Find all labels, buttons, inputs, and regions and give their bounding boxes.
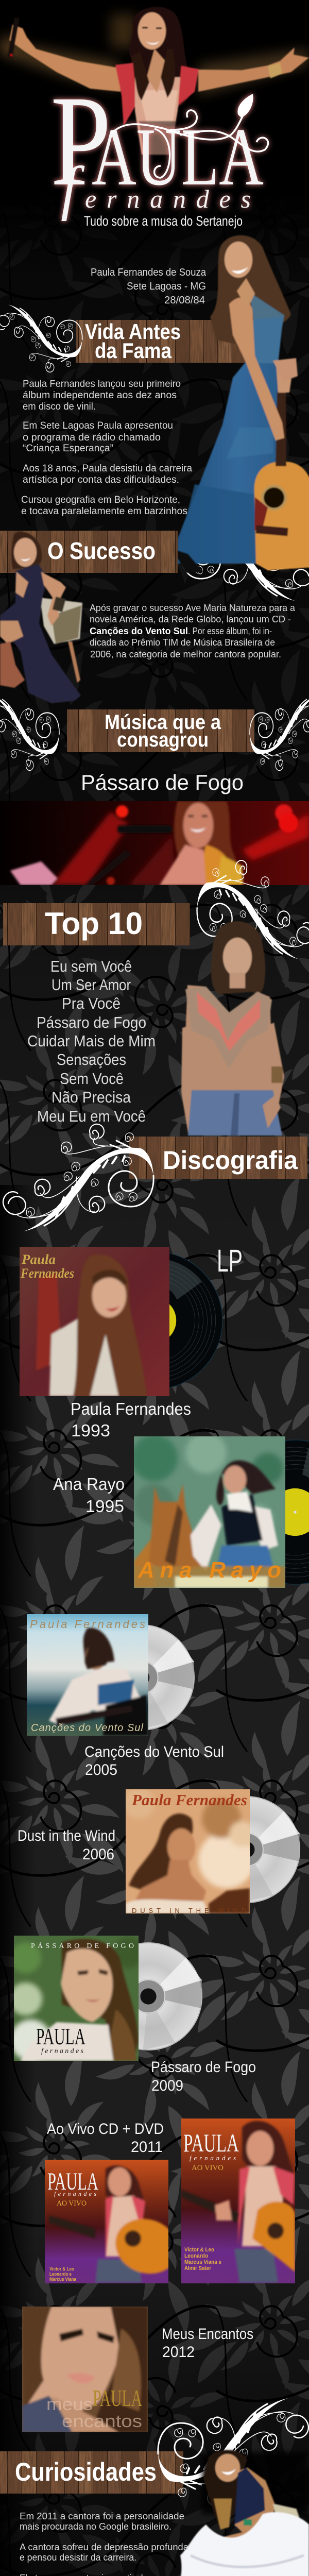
banner: Discografia: Discografia [163,1146,298,1175]
subtitle: Tudo sobre a musa do Sertanejo [84,213,243,229]
text: top 10 list: Sem Você [60,1070,124,1088]
flourish: música left [0,696,59,770]
flourish: vida antes [0,304,82,372]
label: LP: LP [217,1243,243,1278]
banner: O Sucesso: O Sucesso [47,537,156,564]
text: o sucesso: Após gravar o sucesso Ave Maria Natureza para a [90,602,296,613]
album cover: Ao Vivo DVD: PAULA [183,2128,239,2157]
text: top 10 list: Meu Eu em Você [37,1107,146,1125]
text: vida antes da fama: “Criança Esperança” [23,443,113,454]
label: Canções do Vento Sul 2005: 2005 [85,1761,117,1778]
album cover: Ao Vivo CD: Leonardo e [49,2272,72,2277]
album cover: Ao Vivo CD: Victor & Leo [49,2266,74,2272]
name and birth details: Sete Lagoas - MG [127,281,206,292]
text: vida antes da fama: Cursou geografia em Belo Horizonte, [21,495,180,505]
text: top 10 list [27,957,156,1125]
banner: Música que a consagrou [67,709,254,752]
album cover: Ao Vivo DVD: Almir Sater [184,2265,212,2272]
album cover: Ao Vivo DVD: Leonardo [184,2253,208,2259]
text: o sucesso: . Por esse álbum, foi in- [188,625,272,636]
label: Meus Encantos 2012 [162,2326,253,2361]
photo: Paula in denim dress with guitar [173,235,309,573]
banner: Vida Antes da Fama: Vida Antes [85,319,181,344]
album cover: Ao Vivo CD [45,2160,168,2283]
album cover: Ana Rayo [134,1436,285,1588]
banner: Vida Antes da Fama [76,319,251,363]
label: Ao Vivo CD + DVD 2011: Ao Vivo CD + DVD [47,2121,164,2138]
album cover: Ao Vivo DVD: Marcus Viana e [184,2259,221,2265]
disc: Ana Rayo vinyl [223,1440,309,1584]
label: Ana Rayo 1995: 1995 [85,1497,124,1516]
banner: O Sucesso [0,531,178,573]
label: Ana Rayo 1995: Ana Rayo [53,1475,125,1494]
text: o sucesso: dicada ao Prêmio TIM de Música Brasileira de [90,637,275,648]
label: Dust in the Wind 2006 [18,1827,115,1863]
label: Paula Fernandes 1993 [71,1399,191,1440]
album cover: Canções do Vento Sul [27,1614,148,1736]
album cover: Ao Vivo DVD: AO VIVO [192,2164,224,2172]
disc: LP vinyl [84,1251,222,1389]
album cover: Ao Vivo DVD: fernandes [190,2154,236,2162]
text: curiosidades: mais procurada no Google brasileiro. [20,2521,171,2532]
album cover: Meus Encantos [22,2307,148,2432]
text: curiosidades: A cantora sofreu de depressão profunda [20,2542,189,2552]
flourish: top 10 [197,860,309,959]
text: top 10 list: Pra Você [62,994,121,1012]
photo: Paula in dark dress on chair [0,532,82,703]
album cover: Pássaro de Fogo [14,1936,139,2061]
album cover: Ao Vivo CD: AO VIVO [57,2199,87,2208]
text: vida antes da fama: e tocava paralelamente em barzinhos [21,506,187,517]
text: curiosidades: e pensou desistir da carreira. [20,2552,136,2563]
name and birth details [91,267,207,306]
flourish: música right [250,696,309,770]
text: vida antes da fama: Paula Fernandes lançou seu primeiro [23,379,181,389]
banner: Curiosidades: Curiosidades [15,2458,157,2486]
text: top 10 list: Um Ser Amor [52,976,131,994]
text: curiosidades [20,2511,197,2576]
label: Ao Vivo CD + DVD 2011 [47,2121,164,2156]
text: vida antes da fama: em disco de vinil. [23,401,96,412]
text: top 10 list: Eu sem Você [50,957,132,975]
banner: Vida Antes da Fama: da Fama [95,338,172,363]
album cover: Canções do Vento Sul: Canções do Vento Sul [31,1722,144,1734]
label: Dust in the Wind 2006: Dust in the Wind [18,1827,115,1844]
text: top 10 list: Pássaro de Fogo [37,1013,146,1031]
logo: Paula Fernandes: ernandes [85,184,251,213]
banner: Curiosidades [0,2451,183,2494]
album cover: Meus Encantos: meus [46,2395,93,2414]
banner: Música que a consagrou: Música que a [105,711,221,734]
disc: Pássaro de Fogo CD [95,1943,202,2050]
album cover: Canções do Vento Sul: Paula Fernandes [30,1618,145,1631]
photo: Paula in fringe top and jeans [181,921,284,1136]
heading: Pássaro de Fogo: Pássaro de Fogo [81,770,244,794]
text: vida antes da fama: Aos 18 anos, Paula desistiu da carreira [23,463,192,474]
text: o sucesso: 2006, na categoria de melhor cantora popular. [90,649,281,659]
label: Ao Vivo CD + DVD 2011: 2011 [131,2139,163,2156]
banner: Top 10 [3,903,190,945]
text: vida antes da fama: o programa de rádio chamado [23,432,161,443]
label: Paula Fernandes 1993: Paula Fernandes [71,1399,191,1418]
text: vida antes da fama: artística por conta das dificuldades. [23,474,179,485]
album cover: Ao Vivo DVD [181,2119,295,2283]
photo: Paula on stage [0,801,309,885]
banner: Top 10: Top 10 [45,906,143,941]
text: o sucesso: Canções do Vento Sul [90,625,188,636]
logo: Paula Fernandes: f [61,154,85,222]
label: Pássaro de Fogo 2009: 2009 [151,2077,183,2094]
label: Meus Encantos 2012: Meus Encantos [162,2326,253,2343]
disc: Canções CD [89,1625,194,1730]
album cover: Paula Fernandes 1993: Paula [21,1252,56,1267]
album cover: Dust in the Wind: Paula Fernandes [131,1791,247,1809]
text: top 10 list: Não Precisa [52,1088,131,1106]
flourish: discografia [3,1124,153,1231]
text: vida antes da fama: álbum independente aos dez anos [23,390,177,401]
text: o sucesso: novela América, da Rede Globo, lançou um CD - [90,614,291,624]
flourish: right of sucesso [181,504,309,601]
label: Paula Fernandes 1993: 1993 [71,1421,110,1440]
album cover: Pássaro de Fogo: fernandes [41,2047,84,2055]
flourish: curiosidades [158,2398,308,2505]
disc: Dust in the Wind CD [194,1797,300,1903]
label: Canções do Vento Sul 2005: Canções do Vento Sul [84,1743,224,1760]
photo: Paula in white tulle dress [170,2450,309,2576]
label: Dust in the Wind 2006: 2006 [82,1846,114,1863]
album cover: Dust in the Wind: DUST IN THE WIND [132,1907,246,1914]
text: vida antes da fama [21,379,192,517]
label: Meus Encantos 2012: 2012 [162,2344,195,2361]
album cover: Ao Vivo CD: Marcus Viana [49,2277,77,2282]
label: Ana Rayo 1995 [53,1475,125,1516]
album cover: Paula Fernandes 1993: Fernandes [20,1266,74,1281]
banner: Discografia [129,1137,307,1179]
album cover: Pássaro de Fogo: PÁSSARO DE FOGO [31,1941,134,1950]
banner: Música que a consagrou: consagrou [117,728,209,751]
text: curiosidades: Em 2011 a cantora foi a personalidade [20,2511,184,2521]
album cover: Ao Vivo CD: PAULA [47,2168,98,2195]
album cover: Ao Vivo CD: fernandes [54,2190,96,2197]
album cover: Paula Fernandes 1993 [20,1247,169,1396]
logo: Paula Fernandes: P [50,69,111,213]
album cover: Pássaro de Fogo: PAULA [36,2023,85,2049]
text: top 10 list: Cuidar Mais de Mim [27,1032,156,1050]
label: Pássaro de Fogo 2009 [151,2059,256,2094]
album cover: Ao Vivo DVD: Victor & Leo [184,2247,214,2253]
album cover: Meus Encantos: encantos [62,2412,142,2431]
photo: Paula with open arms [0,7,309,157]
text: vida antes da fama: Em Sete Lagoas Paula apresentou [23,420,173,431]
label: Pássaro de Fogo 2009: Pássaro de Fogo [151,2059,256,2076]
text: top 10 list: Sensações [57,1050,126,1069]
text: o sucesso [90,602,296,659]
label: Canções do Vento Sul 2005 [84,1743,224,1778]
name and birth details: Paula Fernandes de Souza [91,267,207,278]
logo: Paula Fernandes [50,69,268,222]
album cover: Ana Rayo: Ana Rayo [138,1557,281,1583]
album cover: Dust in the Wind [126,1789,250,1914]
name and birth details: 28/08/84 [164,295,205,306]
